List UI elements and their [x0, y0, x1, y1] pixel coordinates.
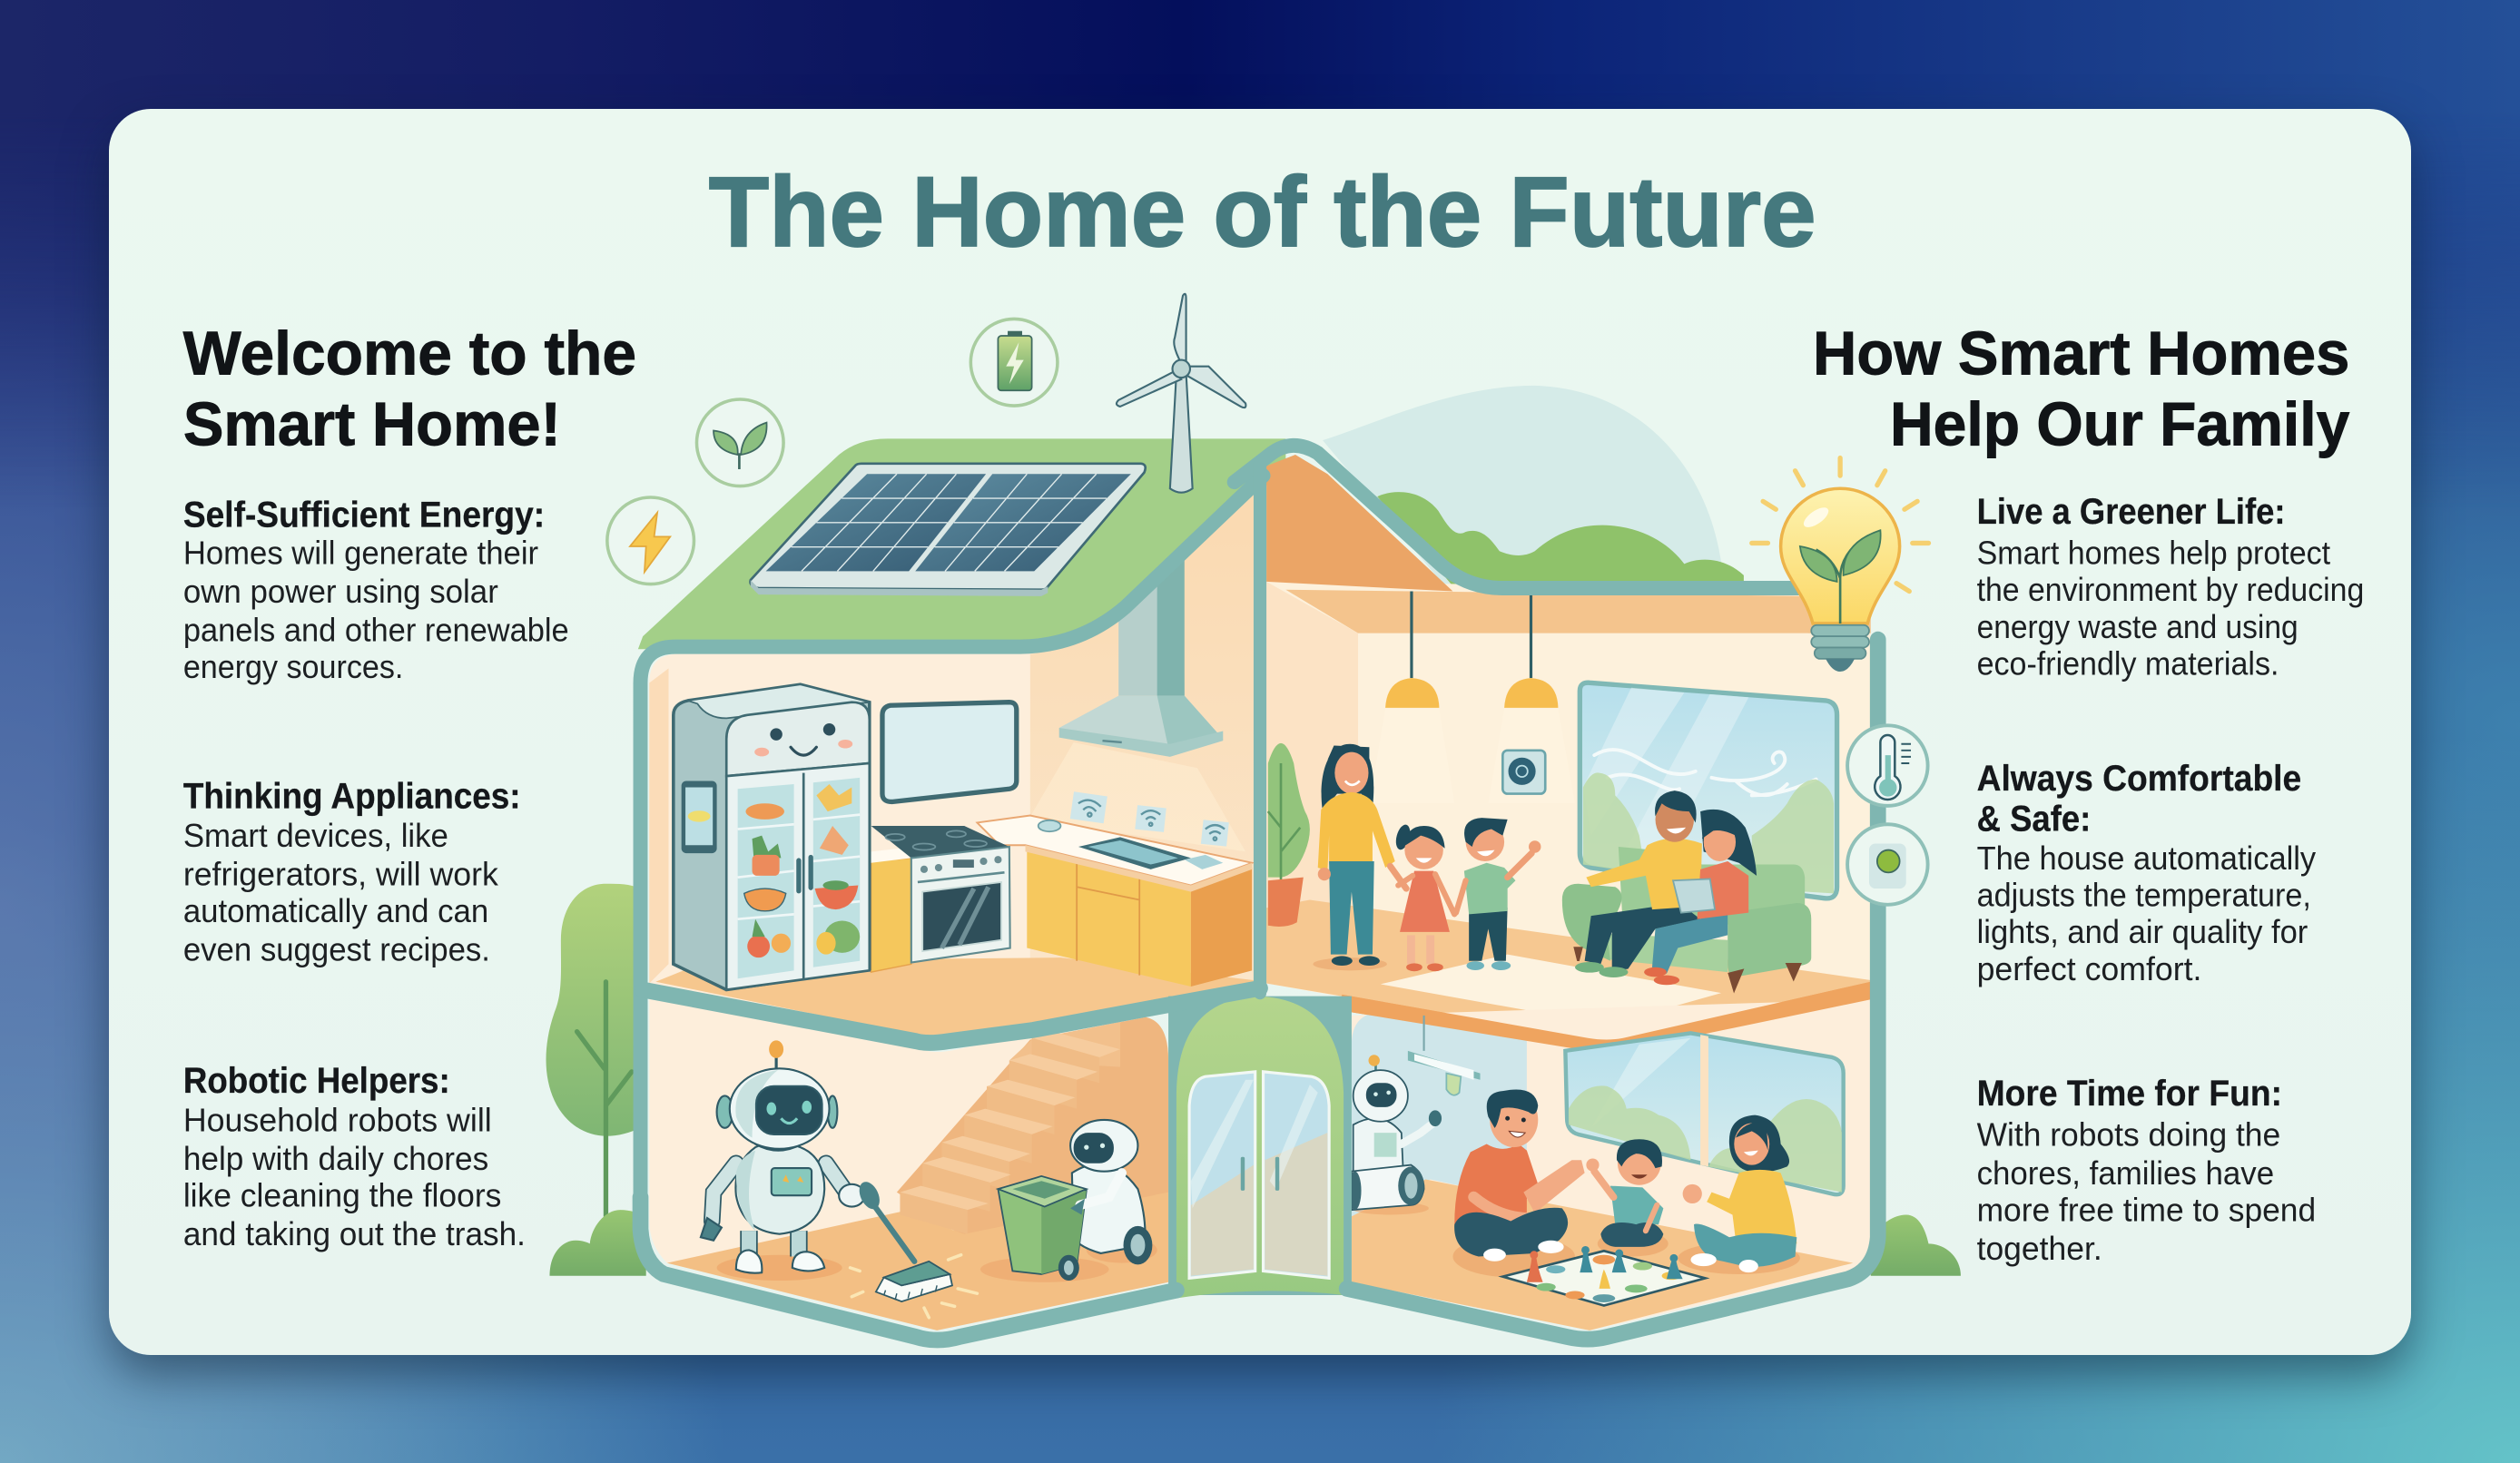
fridge side tablet — [682, 781, 717, 853]
text block: comfortable and safe — [1977, 759, 2317, 987]
text block: comfortable and safe: The house automatically — [1977, 840, 2317, 877]
icon: lightning bolt — [607, 497, 694, 584]
mother on sofa — [1644, 810, 1757, 985]
tree left of house — [546, 884, 646, 1276]
heading: welcome: Smart Home! — [183, 390, 561, 458]
text block: more time for fun: chores, families have — [1977, 1154, 2274, 1192]
boy — [1456, 818, 1541, 970]
text block: self-sufficient energy: panels and other renewable — [183, 611, 569, 648]
text block: robotic helpers: and taking out the trash. — [183, 1215, 526, 1252]
oven — [871, 826, 1010, 962]
text block: more time for fun: together. — [1977, 1230, 2102, 1267]
solar panel — [751, 464, 1146, 596]
text block: greener life: eco-friendly materials. — [1977, 645, 2279, 682]
text block: more time for fun: more free time to spend — [1977, 1192, 2316, 1229]
room: living room — [1266, 455, 1871, 1053]
wall screen — [882, 702, 1017, 801]
mop — [851, 1179, 977, 1318]
text block: comfortable and safe: perfect comfort. — [1977, 950, 2201, 987]
father on sofa — [1575, 790, 1702, 977]
wind turbine — [1117, 294, 1245, 493]
title: The Home of the Future — [709, 157, 1816, 268]
icon: air sensor — [1847, 824, 1928, 905]
girl — [1393, 823, 1454, 971]
board game — [1502, 1246, 1705, 1305]
smart fridge — [674, 684, 870, 990]
fridge food — [744, 784, 860, 957]
mother sitting on floor — [1678, 1115, 1800, 1274]
text block: comfortable and safe: adjusts the temperature, — [1977, 877, 2311, 914]
mother — [1313, 744, 1406, 970]
text block: more time for fun — [1977, 1074, 2316, 1267]
text block: self-sufficient energy: Homes will generate their — [183, 534, 538, 571]
counter and cabinets — [871, 816, 1252, 987]
heading: how smart homes help: How Smart Homes — [1813, 320, 2349, 388]
wifi tiles — [1070, 791, 1229, 847]
text block: more time for fun: More Time for Fun: — [1977, 1074, 2282, 1114]
text block: thinking appliances: Smart devices, like — [183, 817, 448, 854]
text block: greener life — [1977, 492, 2364, 682]
green roof — [638, 438, 1285, 649]
text block: thinking appliances: automatically and can — [183, 892, 488, 929]
house walls outline — [641, 446, 1878, 1340]
hill and bushes behind house — [1323, 386, 1744, 588]
fridge face — [754, 723, 852, 756]
text block: comfortable and safe: Always Comfortable — [1977, 759, 2301, 799]
text block: self-sufficient energy: energy sources. — [183, 648, 403, 685]
helper robot waving — [1348, 1016, 1481, 1214]
text block: self-sufficient energy — [183, 496, 569, 685]
icon: battery — [970, 319, 1058, 406]
range hood — [1059, 548, 1223, 757]
text block: thinking appliances — [183, 777, 521, 968]
text block: robotic helpers: Household robots will — [183, 1101, 492, 1138]
text block: greener life: the environment by reducing — [1977, 571, 2364, 608]
text block: thinking appliances: refrigerators, will work — [183, 856, 499, 893]
pendant lamps — [1369, 592, 1575, 803]
text block: comfortable and safe: lights, and air quality for — [1977, 913, 2308, 950]
robot with mop — [701, 1040, 864, 1273]
staircase — [900, 1022, 1120, 1234]
text block: robotic helpers: Robotic Helpers: — [183, 1061, 450, 1101]
window with garden view — [1565, 1033, 1844, 1194]
trash bin with helper robot — [980, 1120, 1157, 1282]
text block: robotic helpers: like cleaning the floors — [183, 1177, 501, 1214]
father sitting on floor — [1452, 1089, 1585, 1277]
heading: welcome: Welcome to the — [183, 320, 636, 388]
text block: more time for fun: With robots doing the — [1977, 1115, 2280, 1153]
text block: thinking appliances: even suggest recipes. — [183, 931, 490, 968]
text block: greener life: Smart homes help protect — [1977, 534, 2330, 571]
robot shadow — [717, 1255, 842, 1281]
text block: self-sufficient energy: own power using solar — [183, 573, 498, 610]
text block: robotic helpers — [183, 1061, 526, 1252]
text block: robotic helpers: help with daily chores — [183, 1140, 488, 1177]
entry door arch — [1168, 997, 1352, 1299]
text block: thinking appliances: Thinking Appliances: — [183, 777, 521, 817]
child sitting on floor — [1586, 1139, 1669, 1256]
big window — [1580, 682, 1837, 898]
living room floor — [1266, 899, 1871, 1053]
kitchen light glow — [1029, 742, 1245, 851]
text block: greener life: Live a Greener Life: — [1977, 492, 2286, 532]
sofa with parents — [1562, 790, 1811, 990]
heading: welcome — [183, 320, 636, 458]
panel: left text column — [183, 320, 636, 1252]
text block: self-sufficient energy: Self-Sufficient Energy: — [183, 496, 545, 535]
cooktop and sink on counter — [1039, 820, 1223, 869]
bush right of house — [1871, 1214, 1961, 1276]
room: lower right family game room — [1342, 982, 1871, 1330]
heading: how smart homes help — [1813, 320, 2350, 458]
house illustration — [607, 294, 1928, 1340]
icon: thermometer — [1847, 725, 1928, 806]
heading: how smart homes help: Help Our Family — [1890, 390, 2350, 458]
room: lower left with stairs — [649, 997, 1168, 1330]
lightbulb with sprout — [1752, 458, 1928, 672]
panel: right text column — [1813, 320, 2364, 1267]
icon: sprout — [696, 399, 783, 486]
text block: greener life: energy waste and using — [1977, 608, 2299, 645]
card panel — [109, 109, 2411, 1355]
room: kitchen — [649, 482, 1254, 1041]
potted plant — [1268, 743, 1310, 927]
text block: comfortable and safe: & Safe: — [1977, 799, 2091, 839]
thermostat on wall — [1502, 751, 1545, 794]
